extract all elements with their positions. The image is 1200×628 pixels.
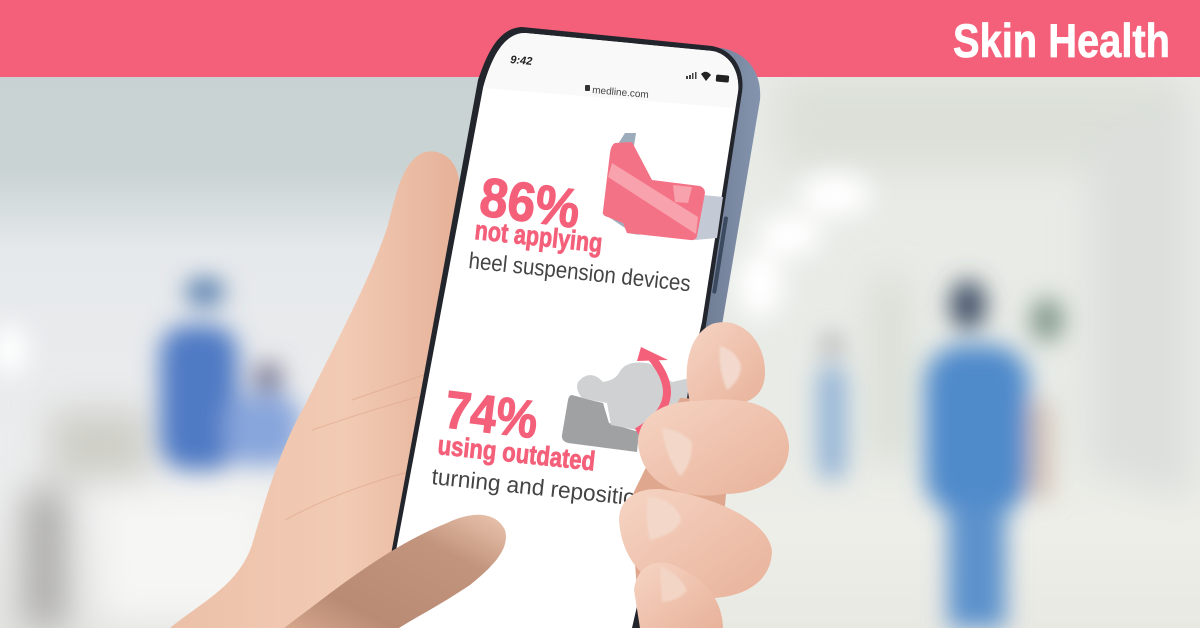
stat 86% [467, 165, 692, 296]
pink label: not applying [473, 215, 604, 258]
header band [0, 0, 1200, 77]
finger base [630, 398, 735, 628]
finger 2 [638, 399, 789, 496]
stat 74% [430, 380, 637, 510]
lock icon [585, 85, 590, 91]
phone side frame [660, 46, 760, 410]
value: 86% [476, 165, 584, 240]
battery icon [716, 74, 729, 83]
phone [384, 27, 760, 628]
hand: palm and index finger behind phone [170, 151, 459, 628]
status bar [510, 54, 729, 83]
description: heel suspension devices [467, 247, 692, 296]
rotation arrow [637, 358, 667, 432]
phone bezel [384, 27, 743, 628]
finger 3 [619, 489, 772, 598]
pink label: using outdated [436, 430, 597, 476]
wifi icon [701, 72, 711, 81]
finger 4 [634, 562, 723, 628]
finger 1 [687, 322, 765, 405]
side button [712, 216, 728, 294]
phone screen [388, 33, 738, 628]
description: turning and repositio [430, 463, 637, 510]
clock: 9:42 [510, 54, 533, 68]
icon: patient turning wedge [562, 347, 690, 452]
icon: heel suspension boot [603, 133, 723, 240]
hand: right fingers [619, 322, 789, 628]
browser bar tint [483, 33, 738, 108]
hand: thumb [284, 515, 506, 628]
url bar: medline.com [592, 85, 649, 101]
value: 74% [442, 380, 541, 450]
signal icon [686, 72, 696, 79]
